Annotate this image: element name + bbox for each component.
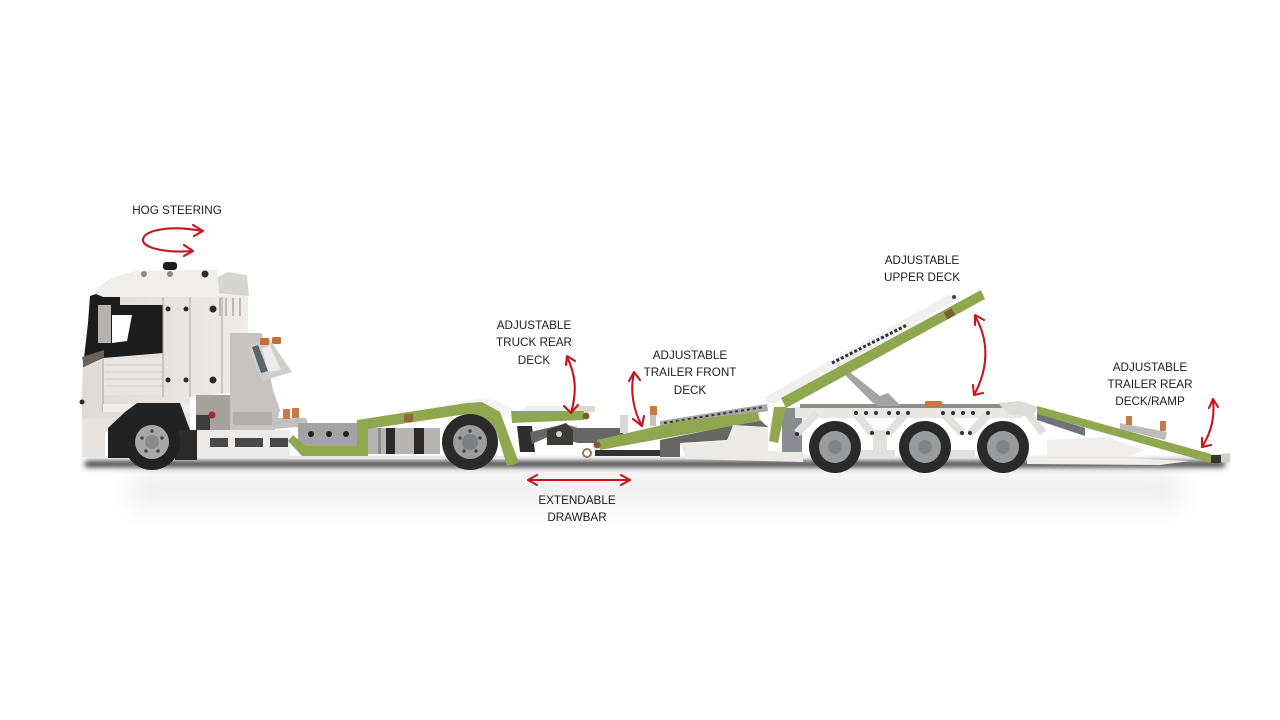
label: adjustable upper deck: ADJUSTABLE <box>885 254 959 267</box>
label: adjustable truck rear deck: DECK <box>518 354 550 367</box>
extendable drawbar <box>517 415 680 457</box>
battery tanks <box>368 428 440 454</box>
arrow: trailer rear ramp <box>1202 399 1218 447</box>
arrow: extendable drawbar <box>528 475 630 485</box>
label: adjustable trailer rear deck/ramp: ADJUSTABLE <box>1113 361 1187 374</box>
trailer rear ramp <box>1037 406 1230 463</box>
label: adjustable trailer rear deck/ramp: DECK/RAMP <box>1115 395 1185 408</box>
green truck deck <box>288 398 519 466</box>
label: adjustable truck rear deck: ADJUSTABLE <box>497 319 571 332</box>
label: extendable drawbar: DRAWBAR <box>547 511 607 524</box>
front wheel arch <box>108 403 190 458</box>
truck chassis <box>175 423 520 460</box>
label: adjustable trailer rear deck/ramp: TRAILER REAR <box>1107 378 1193 391</box>
arrow: upper deck <box>973 315 985 395</box>
label: adjustable trailer front deck: ADJUSTABLE <box>653 349 727 362</box>
arrow: truck rear deck <box>564 356 578 413</box>
trailer lower body <box>660 420 768 457</box>
label: adjustable upper deck: UPPER DECK <box>884 271 960 284</box>
upper deck strut <box>843 370 901 406</box>
arrow: hog steering <box>143 225 203 256</box>
label: extendable drawbar: EXTENDABLE <box>538 494 616 507</box>
trailer rear hull <box>1027 437 1190 465</box>
lower cab front <box>82 418 112 457</box>
truck rear deck <box>511 406 595 423</box>
ground shadow <box>85 461 1225 508</box>
door panels <box>103 358 163 395</box>
cab door and window black frame <box>83 294 163 367</box>
truck wheels <box>124 414 498 470</box>
truck and trailer model <box>80 262 1230 473</box>
rear cab panel and light rack <box>196 333 309 430</box>
label: adjustable trailer front deck: DECK <box>674 384 706 397</box>
adjustable upper deck <box>765 290 985 408</box>
trailer chassis <box>680 401 1085 462</box>
green support pillar <box>769 407 786 443</box>
arrow: trailer front deck <box>629 372 644 426</box>
truck cab <box>80 262 249 458</box>
green trailer front deck <box>594 404 768 450</box>
label: adjustable trailer front deck: TRAILER FRONT <box>644 366 736 379</box>
label: adjustable truck rear deck: TRUCK REAR <box>496 336 572 349</box>
trailer wheels <box>809 421 1029 473</box>
label: hog steering: HOG STEERING <box>132 204 222 217</box>
